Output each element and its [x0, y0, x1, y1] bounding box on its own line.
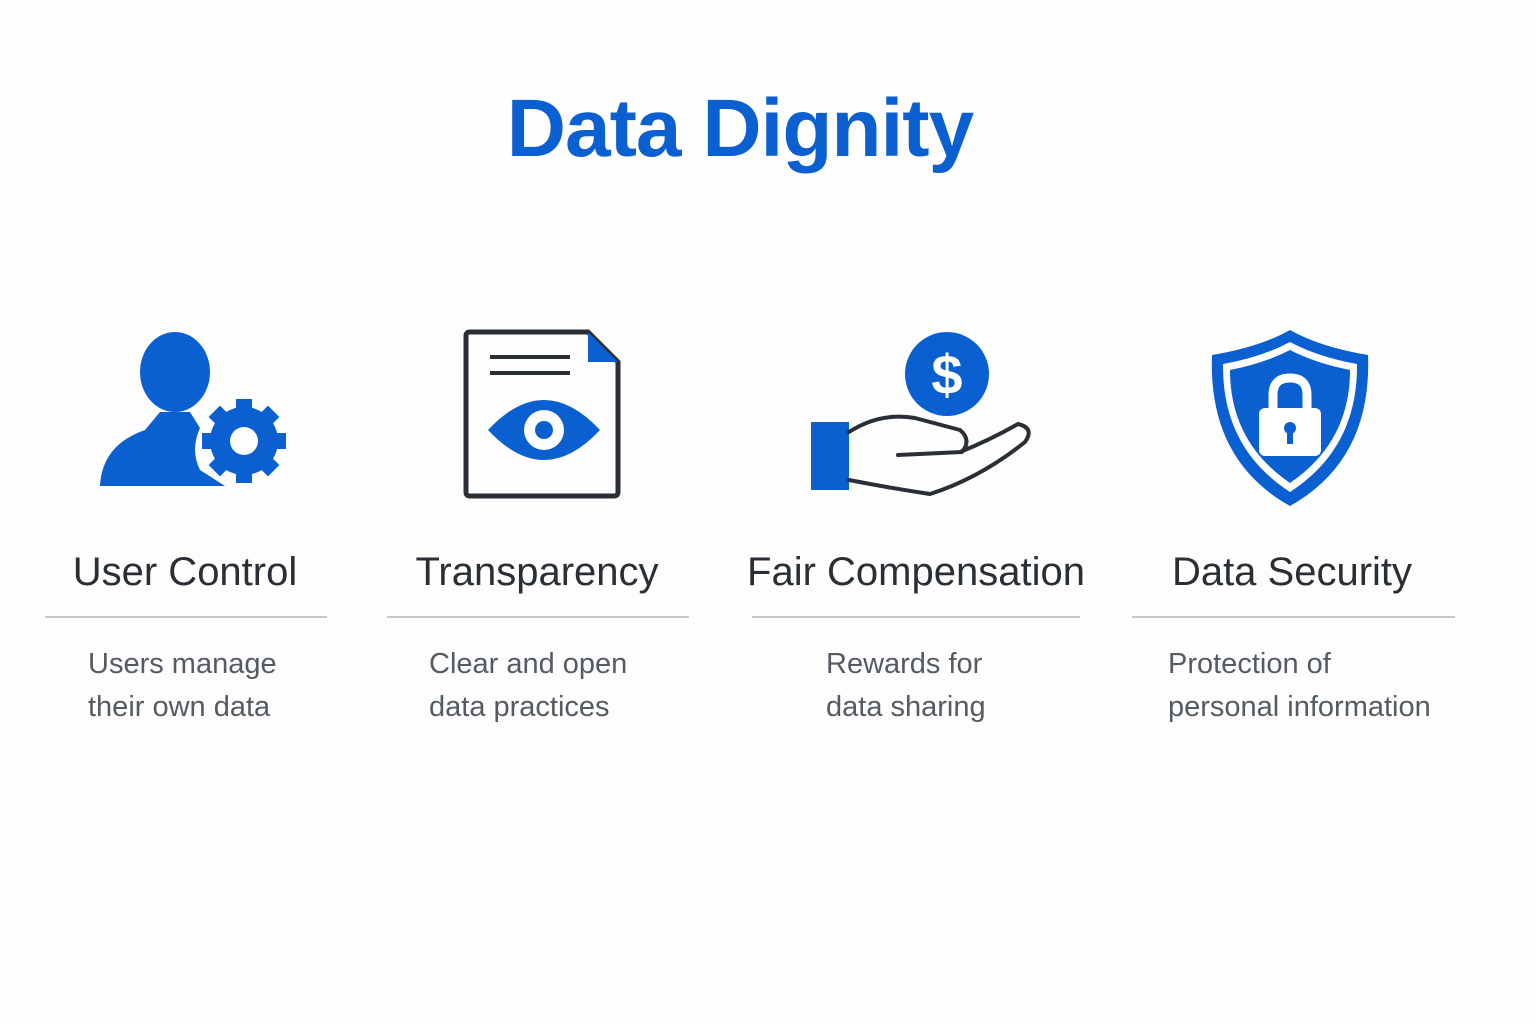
text: fair compensation description: data sharing: [826, 691, 986, 723]
text: transparency description: Clear and open: [429, 648, 627, 680]
text: fair compensation description: Rewards for: [826, 648, 982, 680]
text: transparency description: data practices: [429, 691, 610, 723]
icon: hand with coin: [811, 332, 1031, 496]
text: user control description: Users manage: [88, 648, 277, 680]
heading: Transparency: Transparency: [415, 550, 659, 594]
icon: document with eye: [464, 330, 620, 498]
heading: Fair Compensation: Fair Compensation: [747, 550, 1085, 594]
icon: hand with coin: $: [931, 343, 963, 406]
text: fair compensation description: [826, 648, 986, 723]
text: data security description: [1168, 648, 1431, 723]
text: transparency description: [429, 648, 627, 723]
title: Data Dignity: [507, 83, 973, 174]
heading: User Control: User Control: [73, 550, 297, 594]
heading: Data Security: Data Security: [1172, 550, 1412, 594]
icon: user with gear: [100, 332, 286, 486]
text: user control description: their own data: [88, 691, 270, 723]
text: data security description: personal information: [1168, 691, 1431, 723]
icon: shield with lock: [1212, 330, 1368, 506]
text: user control description: [88, 648, 277, 723]
text: data security description: Protection of: [1168, 648, 1331, 680]
